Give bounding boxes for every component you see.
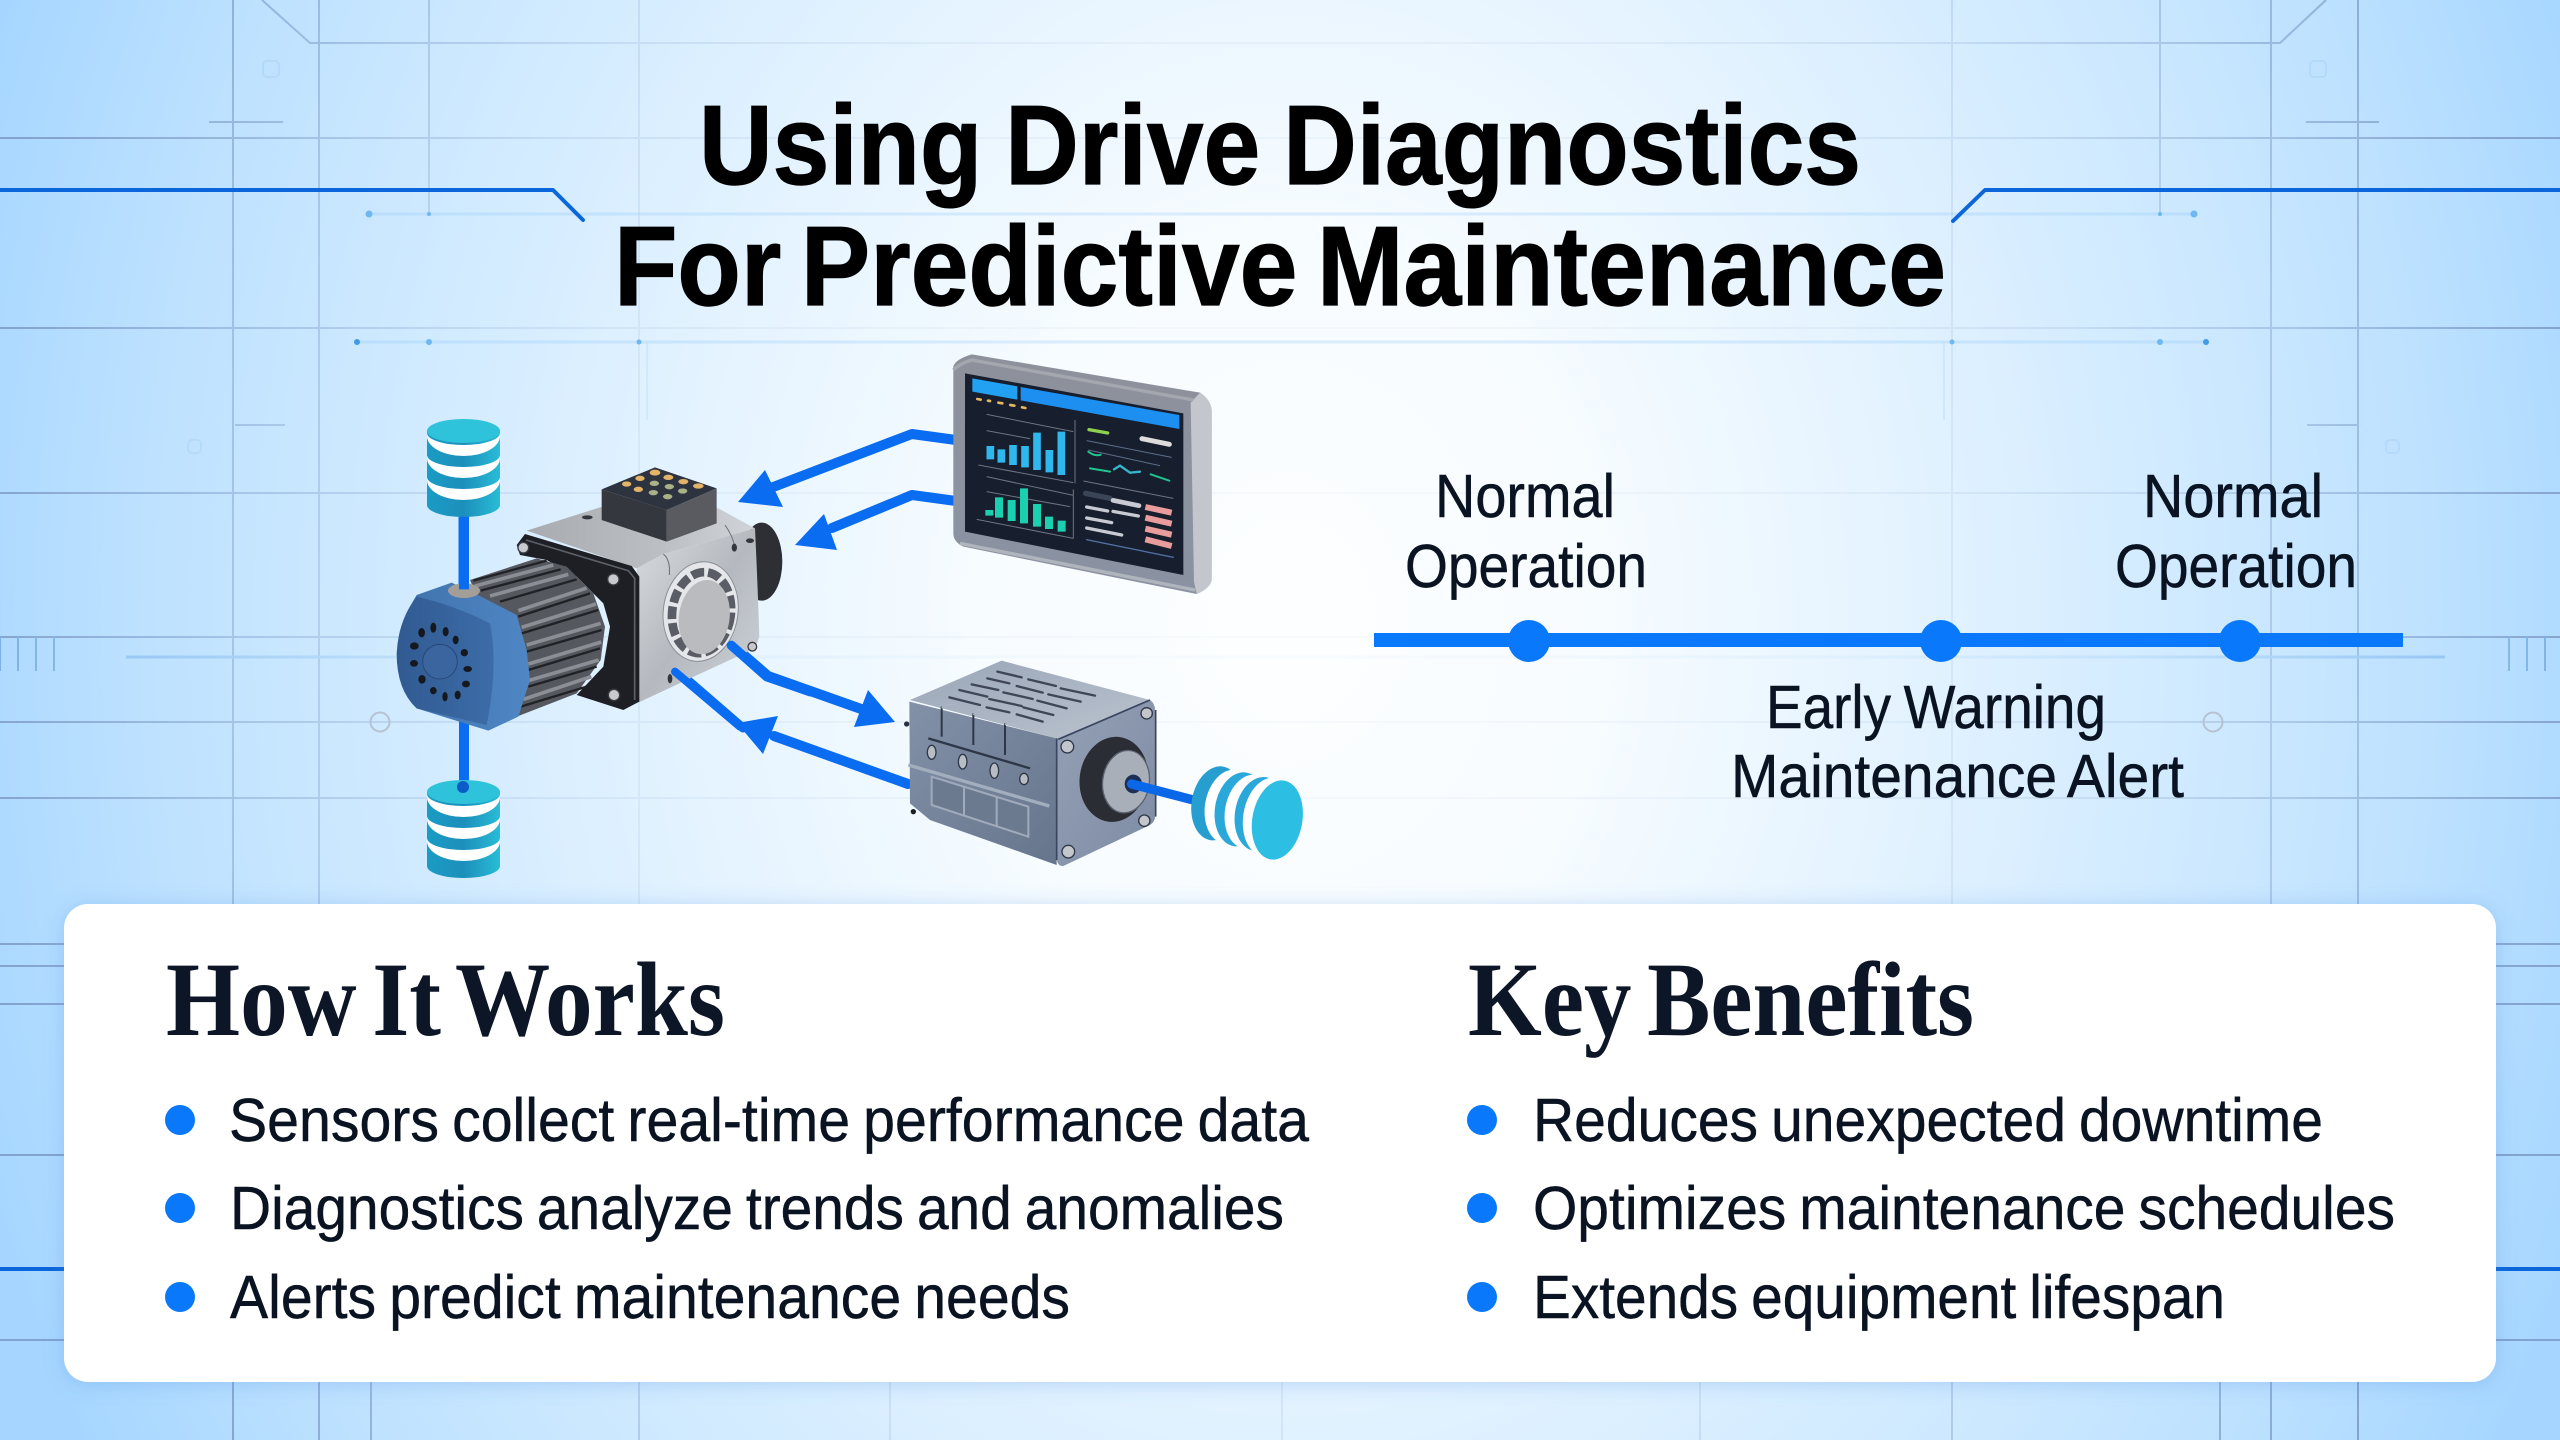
- sensor block: [602, 467, 717, 542]
- list: how it works: Alerts predict maintenance needs: [230, 1263, 1070, 1331]
- label: second normal operation: Normal: [2143, 462, 2323, 530]
- terminal strip: [904, 704, 1049, 837]
- status bars: [1086, 430, 1173, 557]
- timeline markers: [1508, 620, 2261, 662]
- screen: [965, 373, 1183, 575]
- heading: key benefits: Key Benefits: [1468, 941, 1974, 1058]
- fan vent: [657, 557, 745, 666]
- title: For Predictive Maintenance: [614, 203, 1946, 329]
- title: Using Drive Diagnostics: [699, 82, 1861, 208]
- list: key benefits: Extends equipment lifespan: [1533, 1263, 2225, 1331]
- label: first normal operation: Normal: [1435, 462, 1615, 530]
- cooling slots: [949, 672, 1095, 722]
- main silver housing: [527, 500, 759, 703]
- bar chart: blue: [990, 432, 1061, 475]
- cable ends on housing: [675, 645, 810, 727]
- drive body: [909, 661, 1156, 866]
- heading: how it works: How It Works: [166, 941, 725, 1058]
- label: first normal operation: [1405, 462, 1647, 600]
- list: key benefits: [1467, 1086, 2395, 1331]
- monitor frame: [953, 354, 1212, 594]
- label: second normal operation: [2115, 462, 2357, 600]
- bolts: [1061, 708, 1152, 858]
- indicator dots: [977, 399, 1025, 408]
- chart grid: [977, 414, 1173, 538]
- ribbed motor body: [470, 558, 605, 716]
- label: early warning: Early Warning: [1766, 673, 2106, 741]
- panel: how it works and key benefits: [64, 904, 2496, 1382]
- output disc stack: [1186, 762, 1309, 864]
- list: how it works: [165, 1086, 1309, 1331]
- illustration: motor: [397, 467, 810, 731]
- accent lines: [0, 190, 2560, 1269]
- list: how it works: Sensors collect real-time performance data: [229, 1086, 1309, 1154]
- bar chart: teal: [989, 488, 1062, 532]
- blue end cap: [397, 583, 530, 731]
- list: key benefits: Optimizes maintenance schedules: [1533, 1174, 2395, 1242]
- label: second normal operation: Operation: [2115, 532, 2357, 600]
- timeline: [1374, 462, 2403, 810]
- list: how it works: Diagnostics analyze trends and anomalies: [230, 1174, 1284, 1242]
- cable nub: [448, 517, 480, 598]
- illustration: connection arrows: [676, 434, 956, 784]
- icon: lower data stack: [427, 720, 500, 878]
- circuit nodes: [354, 210, 2222, 732]
- label: first normal operation: Operation: [1405, 532, 1647, 600]
- timeline bar: [1374, 633, 2403, 647]
- illustration: drive unit: [904, 661, 1309, 866]
- title: [614, 82, 1946, 329]
- output shaft: [1074, 732, 1193, 826]
- illustration: monitor: [953, 354, 1212, 594]
- list: key benefits: Reduces unexpected downtime: [1533, 1086, 2323, 1154]
- header bar: [972, 378, 1179, 429]
- icon: upper data stack: [427, 419, 500, 640]
- bolts: [518, 542, 757, 701]
- label: early warning: [1731, 673, 2184, 810]
- rear housing: [741, 523, 782, 601]
- flange: [517, 534, 639, 710]
- label: early warning: Maintenance Alert: [1731, 742, 2184, 810]
